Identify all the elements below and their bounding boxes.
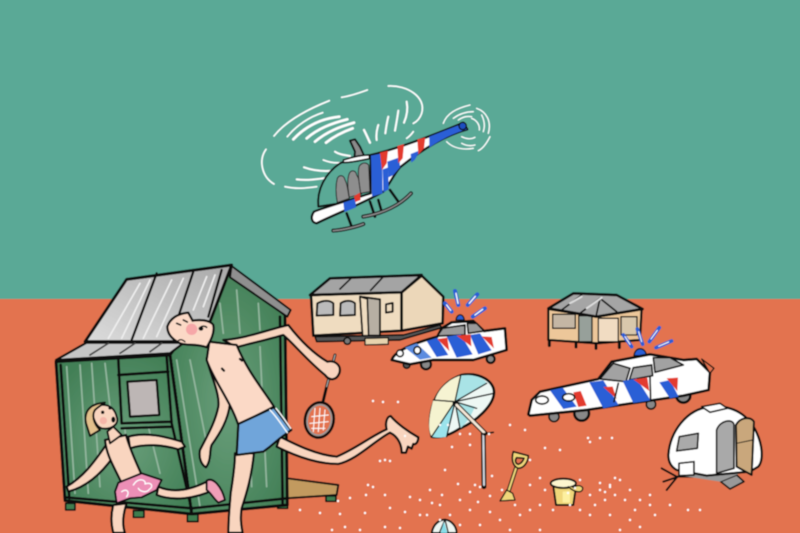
bucket xyxy=(551,479,583,505)
rotor mast xyxy=(350,139,367,180)
umbrella shaft xyxy=(455,403,485,433)
man's head xyxy=(167,313,214,347)
beacon rays xyxy=(445,291,485,317)
hut front roof xyxy=(56,343,184,360)
beacon xyxy=(634,349,647,356)
helicopter xyxy=(262,86,490,231)
open door xyxy=(736,418,754,475)
beacon xyxy=(456,315,464,320)
doorway xyxy=(717,421,734,473)
front wall xyxy=(311,292,402,336)
wheels xyxy=(549,412,559,422)
hut back roof xyxy=(85,265,232,342)
wheels xyxy=(421,359,431,369)
hut window pane xyxy=(127,380,159,417)
beach hut xyxy=(56,265,338,522)
boy xyxy=(67,403,225,533)
hut gable eave xyxy=(230,266,291,317)
body xyxy=(392,321,507,364)
passengers xyxy=(336,176,349,203)
chassis xyxy=(315,325,442,342)
towbar and gas box xyxy=(662,468,693,490)
racket xyxy=(302,355,336,440)
beach ball xyxy=(432,520,457,533)
headlights xyxy=(536,396,548,404)
boy foot xyxy=(207,480,225,503)
man's racket arm xyxy=(223,325,340,379)
hut front wall xyxy=(56,355,192,514)
gable wall xyxy=(402,276,443,331)
police car near xyxy=(392,291,507,369)
skids xyxy=(333,190,411,231)
hut window and door frame xyxy=(61,317,287,510)
beach umbrella xyxy=(429,374,494,487)
man's nipples xyxy=(222,359,242,371)
window xyxy=(677,433,698,451)
rear spoiler xyxy=(702,359,714,373)
fuselage xyxy=(312,123,467,223)
steps behind hut xyxy=(287,478,338,498)
windows xyxy=(317,301,393,316)
wheel and step xyxy=(344,338,351,344)
tail tip xyxy=(459,122,466,130)
headlights xyxy=(397,350,403,357)
beacon rays xyxy=(623,328,672,348)
man's raised leg xyxy=(277,416,418,464)
stripes xyxy=(550,377,679,409)
bungalow roof xyxy=(548,293,643,317)
windows xyxy=(600,358,683,382)
bungalow legs xyxy=(549,340,619,348)
main rotor blur xyxy=(262,86,422,188)
roof vent xyxy=(702,403,727,412)
boy face xyxy=(101,406,115,423)
panels xyxy=(455,375,487,402)
man xyxy=(167,313,418,533)
stripes xyxy=(405,333,494,360)
hut right wall xyxy=(170,270,287,514)
cockpit bubble xyxy=(318,155,372,207)
boy hair xyxy=(86,403,105,436)
boy limbs xyxy=(67,445,113,492)
mobile home xyxy=(310,275,443,345)
bungalow openings xyxy=(553,314,637,342)
roof ribs xyxy=(132,270,222,340)
wall planks xyxy=(67,290,267,507)
door xyxy=(360,297,380,336)
racket head xyxy=(302,400,336,440)
canopy xyxy=(430,374,494,437)
sand speckles xyxy=(300,401,700,530)
police car far xyxy=(528,328,714,422)
bungalow walls xyxy=(548,309,642,343)
man's swim shorts xyxy=(237,407,291,455)
spokes xyxy=(432,376,494,437)
pole xyxy=(476,433,491,487)
ground shadow xyxy=(677,473,740,482)
sky background xyxy=(0,0,800,300)
boy swim shorts xyxy=(115,473,162,503)
tail rotor blur xyxy=(443,105,490,151)
shovel xyxy=(500,452,528,501)
sand background xyxy=(0,299,800,533)
boy torso xyxy=(105,435,142,483)
boy neck and head xyxy=(107,427,122,443)
front locker xyxy=(679,462,694,476)
caravan xyxy=(662,403,762,490)
body xyxy=(528,354,710,416)
windows xyxy=(437,323,484,336)
bungalow xyxy=(548,293,643,348)
man's face xyxy=(177,320,207,342)
rotor hub xyxy=(343,155,369,163)
man's torso xyxy=(207,342,274,425)
man's standing leg xyxy=(228,453,254,533)
fuselage stripes xyxy=(343,123,467,212)
hut feet xyxy=(66,496,336,522)
roof xyxy=(310,275,422,295)
racket handle xyxy=(323,355,335,403)
body xyxy=(668,406,762,476)
man's left arm xyxy=(200,358,230,467)
